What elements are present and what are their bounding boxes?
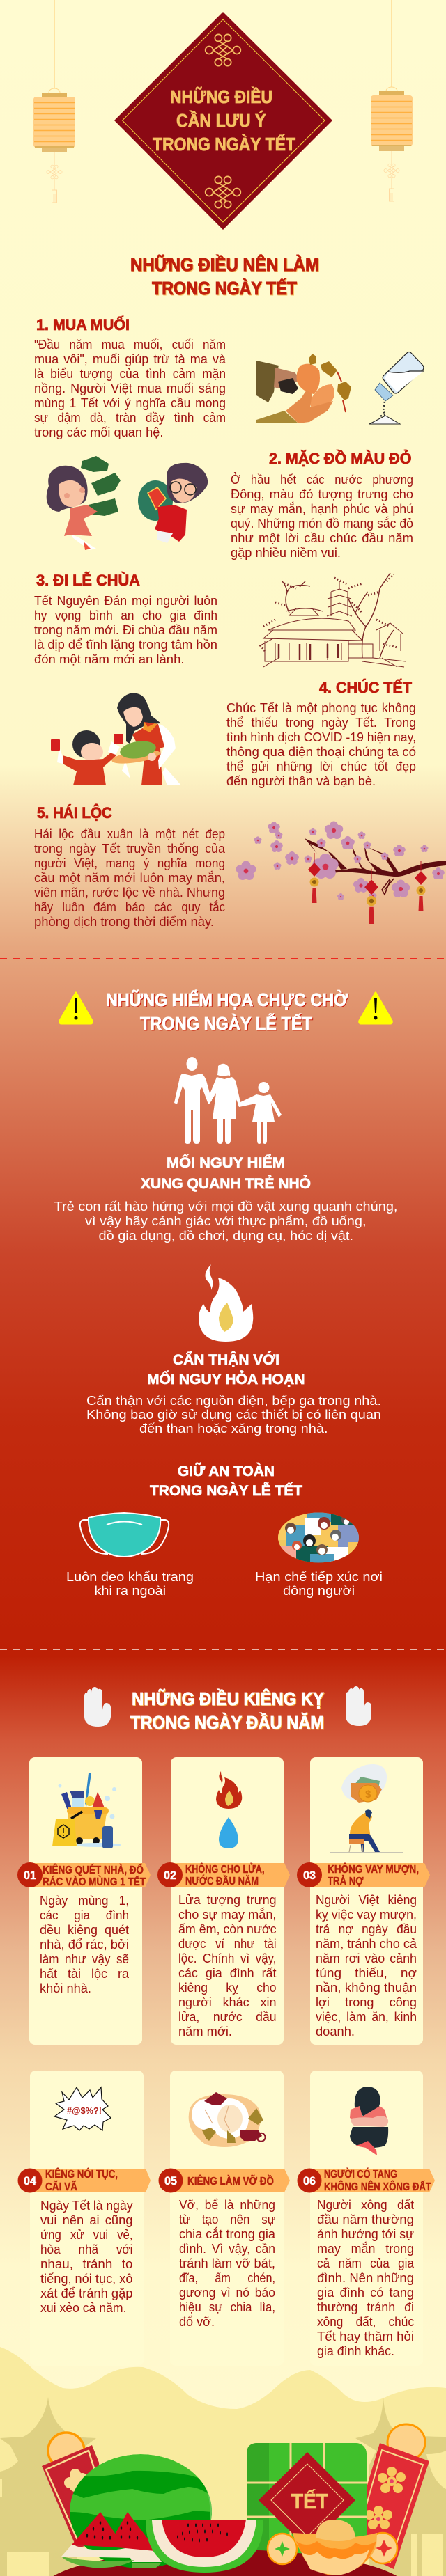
panel: taboo 06 mourning families xyxy=(297,2071,435,2366)
panel: 2 wear red: quý. Những món đồ mang sắc đỏ xyxy=(231,516,413,531)
title diamond: CẦN LƯU Ý xyxy=(176,110,266,131)
panel: 4 new year greetings: thể thiếu trong ngày Tết. Trong xyxy=(226,716,416,730)
icon: curse speech burst xyxy=(54,2087,111,2130)
icon: family silhouette xyxy=(174,1057,282,1144)
panel: 2 wear red xyxy=(231,450,413,560)
icon: crowd of masked people xyxy=(278,1510,359,1564)
heading: staying safe: GIỮ AN TOÀN xyxy=(178,1462,275,1479)
panel: 1 buy salt: nồng. Người Việt mua muối sáng xyxy=(34,382,226,395)
footer: banh chung xyxy=(247,2443,367,2557)
ribbon label 04 xyxy=(18,2168,151,2193)
text block 04: nhau, tránh to xyxy=(40,2257,132,2271)
text block 05: hiệu sự chia lìa, xyxy=(179,2300,275,2314)
caption: wear a mask xyxy=(66,1570,194,1598)
icon: girl carrying banh chung xyxy=(47,456,121,550)
footer scene: pagoda silhouettes xyxy=(0,2397,446,2576)
title diamond xyxy=(114,12,332,230)
text block: fire hazards: Không bao giờ sử dụng các thiết bị có liên quan xyxy=(86,1408,381,1422)
text block: children hazards: XUNG QUANH TRẺ NHỎ xyxy=(141,1175,311,1192)
panel: 1 buy salt: trong các mối quan hệ. xyxy=(34,425,163,439)
panel: 5 picking lucky buds: phòng dịch trong thời điểm này. xyxy=(34,915,214,929)
text block 02: cho sự may mắn, xyxy=(178,1907,276,1922)
text block 06: thường tránh đi xyxy=(317,2300,414,2314)
ribbon label 03: KHÔNG VAY MƯỢN, xyxy=(328,1863,419,1876)
text block 05: đình. Vì vậy, cần xyxy=(179,2242,275,2256)
ribbon label 01: KIÊNG QUÉT NHÀ, ĐỔ xyxy=(43,1864,144,1876)
text block 06: ảnh hưởng tới sự xyxy=(317,2227,414,2241)
panel: 2 wear red: như một lời cầu chúc đầu năm xyxy=(231,531,413,545)
text block 05: đổ vỡ. xyxy=(179,2315,215,2329)
text block 06: xông đất, chúc xyxy=(317,2315,414,2329)
ribbon label 02: NƯỚC ĐẦU NĂM xyxy=(185,1875,259,1887)
title diamond: TRONG NGÀY TẾT xyxy=(153,134,295,155)
divider: white dashed line xyxy=(0,1649,446,1650)
panel: 4 new year greetings xyxy=(226,679,416,788)
footer: gold coins and ingot xyxy=(268,2520,397,2575)
text block 04: xui xẻo cả năm. xyxy=(40,2301,127,2315)
icon: broken dishes xyxy=(189,2092,266,2147)
title diamond: NHỮNG ĐIỀU xyxy=(170,86,272,107)
panel: 5 picking lucky buds: viên mãn, rước lộc về nhà. Nhưng xyxy=(34,886,225,900)
icon: face mask xyxy=(80,1513,169,1557)
icon: boy carrying watermelon xyxy=(138,463,208,543)
text block 05 xyxy=(179,2198,276,2329)
text block 03: năm rơi vào cảnh xyxy=(316,1951,417,1965)
icon: salt shaker xyxy=(369,352,424,424)
panel: 3 go to pagoda: 3. ĐI LỄ CHÙA xyxy=(36,571,140,589)
text block 06 xyxy=(317,2198,415,2358)
text block 06: đầu năm thường xyxy=(317,2213,414,2226)
footer: left coin xyxy=(48,2433,84,2469)
panel: 1 buy salt: 1. MUA MUỐI xyxy=(36,315,130,333)
panel: 3 go to pagoda xyxy=(34,571,217,666)
icon: wallet with money xyxy=(341,1764,387,1803)
heading: staying safe xyxy=(150,1462,302,1499)
icon: right warning triangle xyxy=(360,993,392,1023)
text block 06: đình. Nên những xyxy=(317,2271,414,2285)
icon: worried man on stool xyxy=(330,1809,403,1853)
text block 06: may mắn trong xyxy=(317,2241,414,2256)
panel: 4 new year greetings: thông qua điện thoại chúng ta có xyxy=(226,745,416,759)
footer: Tet diamond label: TẾT xyxy=(291,2489,328,2513)
text block: fire hazards: MỐI NGUY HỎA HOẠN xyxy=(147,1369,305,1388)
text block 04: tiếng, nói tục, xô xyxy=(40,2272,132,2286)
panel: 5 picking lucky buds: hãy luôn đảm bảo các quy tắc xyxy=(34,900,225,914)
text block 05: từ tạo nên sự xyxy=(179,2213,275,2226)
text block 06: gia đình có tang xyxy=(317,2286,414,2300)
heading: hazards: TRONG NGÀY LỄ TẾT xyxy=(140,1013,312,1034)
text block 03: kỵ việc vay mượn, xyxy=(316,1908,417,1922)
heading: taboos: NHỮNG ĐIỀU KIÊNG KỴ xyxy=(132,1688,324,1709)
panel: 4 new year greetings: tình hình dịch COVID -19 hiện nay, xyxy=(226,730,416,744)
text block 04: hòa nhã với xyxy=(40,2243,132,2256)
text block 02 xyxy=(178,1893,276,2039)
ribbon label 06 xyxy=(297,2168,435,2193)
panel: 4 new year greetings: Chúc Tết là một phong tục không xyxy=(226,701,416,715)
text block: fire hazards: Cẩn thận với các nguồn điện, bếp ga trong nhà. xyxy=(86,1394,381,1408)
text block 04: vui nên ai cũng xyxy=(40,2213,132,2227)
text block: fire hazards xyxy=(86,1351,381,1436)
text block 05: Vỡ, bể là những xyxy=(179,2198,275,2212)
panel: taboo 05 breaking things xyxy=(159,2071,290,2366)
text block 01: khỏi nhà. xyxy=(40,1981,91,1995)
icon: left hanging lantern xyxy=(33,0,75,203)
panel: 3 go to pagoda: hy vọng bình an cho gia đình xyxy=(34,608,217,622)
caption: avoid crowds: Hạn chế tiếp xúc nơi xyxy=(255,1570,383,1584)
text block 06: cả năm của gia xyxy=(317,2256,415,2270)
text block 04: xát để tránh gặp xyxy=(40,2286,132,2300)
ribbon label 05 xyxy=(159,2168,290,2193)
caption: avoid crowds xyxy=(255,1570,383,1598)
panel: 1 buy salt: mùng 1 Tết với ý nghĩa cầu mong xyxy=(34,396,226,410)
caption: avoid crowds: đông người xyxy=(283,1584,355,1598)
footer: left red envelope xyxy=(42,2445,115,2548)
text block 03: lợi trong công xyxy=(316,1995,417,2009)
footer: right red envelope xyxy=(348,2443,429,2569)
panel: taboo 01 sweeping xyxy=(17,1757,151,2045)
icon: flame xyxy=(199,1264,253,1342)
icon: left stop hand xyxy=(84,1687,111,1727)
icon: curse speech burst: #@$%?! xyxy=(67,2105,102,2116)
panel: 4 new year greetings: 4. CHÚC TẾT xyxy=(319,679,412,696)
text block: children hazards: vì vậy hãy cảnh giác với thực phẩm, đồ uống, xyxy=(85,1214,367,1228)
footer: watermelon half slice xyxy=(146,2520,263,2573)
heading: things to do: NHỮNG ĐIỀU NÊN LÀM xyxy=(130,254,319,275)
text block 01: hất tài lộc ra xyxy=(40,1967,130,1981)
heading: taboos xyxy=(130,1688,324,1733)
caption: wear a mask: Luôn đeo khẩu trang xyxy=(66,1570,194,1584)
panel: 1 buy salt: mua vôi", muối giúp trừ tà ma và xyxy=(34,352,226,366)
icon: hands holding salt bags xyxy=(256,354,351,423)
panel: 2 wear red: gặp nhiều niềm vui. xyxy=(231,546,341,560)
text block 03: nần, không thuận xyxy=(316,1981,417,1995)
text block 01: Ngày mùng 1, xyxy=(40,1894,129,1908)
text block 04 xyxy=(40,2199,132,2315)
text block 02: được ví như tài xyxy=(178,1937,276,1951)
panel: 5 picking lucky buds: trong ngày Tết truyền thống của xyxy=(34,842,226,856)
footer: table xyxy=(40,2550,410,2576)
text block 02: người khác xin xyxy=(178,1995,276,2009)
text block 02: lửa, nước đầu xyxy=(178,2010,276,2024)
ribbon label 01: RÁC VÀO MÙNG 1 TẾT xyxy=(43,1876,146,1888)
icon: mother and child with banh chung xyxy=(51,693,181,785)
ribbon label 05: 05 xyxy=(164,2174,177,2188)
panel: taboo 03 borrowing xyxy=(297,1757,430,2045)
text block 03: năm, tránh cho cả xyxy=(316,1937,417,1951)
heading: things to do: TRONG NGÀY TẾT xyxy=(152,278,297,299)
panel: 5 picking lucky buds xyxy=(34,804,226,929)
panel: 1 buy salt: sự đậm đà, tràn đầy tình cảm xyxy=(34,411,226,425)
panel: 2 wear red: sự may mắn, hạnh phúc và phú xyxy=(231,501,413,516)
panel: taboo 04 bad language xyxy=(18,2071,151,2366)
ribbon label 04: 04 xyxy=(24,2174,37,2188)
icon: pagoda sketch xyxy=(259,573,406,667)
ribbon label 03: 03 xyxy=(303,1869,316,1882)
ribbon label 02: 02 xyxy=(164,1869,176,1882)
icon: flame xyxy=(216,1771,242,1809)
icon: right stop hand xyxy=(346,1686,371,1726)
footer: Tet diamond label xyxy=(259,2452,355,2548)
heading: taboos: TRONG NGÀY ĐẦU NĂM xyxy=(130,1713,324,1733)
heading: hazards: NHỮNG HIỂM HỌA CHỰC CHỜ xyxy=(106,989,348,1010)
ribbon label 04: CÃI VÃ xyxy=(45,2181,77,2193)
text block 02: ấm êm, còn nước xyxy=(178,1922,276,1936)
text block 05: đĩa, ấm chén, xyxy=(179,2271,275,2285)
text block 06: Người xông đất xyxy=(317,2198,414,2212)
text block 02: lộc. Chính vì vậy, xyxy=(178,1951,276,1965)
text block 02: các gia đình rất xyxy=(178,1966,276,1980)
text block: children hazards xyxy=(54,1153,397,1243)
ribbon label 01 xyxy=(17,1862,151,1888)
panel: 1 buy salt xyxy=(34,315,226,439)
text block 03: doanh. xyxy=(316,2025,355,2039)
icon: wallet with money: $ xyxy=(365,1789,371,1800)
ribbon label 06: 06 xyxy=(303,2174,316,2188)
text block 01: làm như vậy sẽ xyxy=(40,1952,129,1966)
panel: 1 buy salt: là biểu tượng của tình cảm mặn xyxy=(34,367,226,381)
icon: left warning triangle xyxy=(60,993,92,1023)
panel: 3 go to pagoda: đón một năm mới an lành. xyxy=(34,652,184,666)
text block 04: ứng xử vui vẻ, xyxy=(40,2228,132,2242)
panel: 4 new year greetings: đến người thân và bạn bè. xyxy=(226,774,376,788)
ribbon label 05: KIÊNG LÀM VỠ ĐỒ xyxy=(187,2175,274,2188)
text block 03: túng thiếu, nợ xyxy=(316,1966,417,1980)
ribbon label 03 xyxy=(297,1862,430,1887)
text block 01: nhà, đổ rác, bởi xyxy=(40,1938,129,1951)
text block 05: gương vì nó báo xyxy=(179,2286,275,2300)
text block 03: Người Việt kiêng xyxy=(316,1893,417,1907)
panel: 3 go to pagoda: là dịp để tĩnh lặng trong tâm hồn xyxy=(34,638,217,652)
text block 06: gia đình khác. xyxy=(317,2344,394,2358)
text block: children hazards: MỐI NGUY HIỂM xyxy=(167,1153,285,1171)
text block: fire hazards: CẨN THẬN VỚI xyxy=(173,1351,279,1368)
ribbon label 04: KIÊNG NÓI TỤC, xyxy=(45,2168,118,2181)
heading: staying safe: TRONG NGÀY LỄ TẾT xyxy=(150,1481,302,1499)
text block 05: chia cắt trong gia xyxy=(179,2226,276,2241)
text block 01: đều kiêng quét xyxy=(40,1923,129,1937)
panel: 2 wear red: Ở hầu hết các nước phương xyxy=(231,472,413,487)
icon: right hanging lantern xyxy=(371,0,413,201)
icon: water drop xyxy=(219,1817,238,1848)
text block 04: Ngày Tết là ngày xyxy=(40,2199,132,2213)
text block: fire hazards: đến than hoặc xăng trong nhà. xyxy=(139,1422,328,1436)
ribbon label 06: NGƯỜI CÓ TANG xyxy=(324,2168,397,2181)
panel: 3 go to pagoda: trong năm mới. Đi chùa đầu năm xyxy=(34,623,217,637)
ribbon label 01: 01 xyxy=(24,1869,36,1882)
heading: things to do xyxy=(130,254,319,299)
text block 01 xyxy=(40,1894,130,1995)
panel: 4 new year greetings: thể gửi những lời chúc tốt đẹp xyxy=(226,760,416,773)
panel: 2 wear red: Đông, màu đỏ tượng trưng cho xyxy=(231,487,413,501)
panel: 5 picking lucky buds: cầu một năm mới luôn may mắn, xyxy=(34,870,225,885)
caption: wear a mask: khi ra ngoài xyxy=(95,1584,166,1598)
footer scene: hills xyxy=(0,2347,446,2576)
text block 01: các gia đình xyxy=(40,1908,129,1922)
footer: right coin xyxy=(387,2424,425,2460)
heading: hazards xyxy=(106,989,348,1034)
text block: children hazards: đồ gia dụng, đồ chơi, dụng cụ, hóc dị vật. xyxy=(99,1229,353,1243)
text block 06: Tết hay thăm hỏi xyxy=(317,2330,414,2343)
ribbon label 02: KHÔNG CHO LỬA, xyxy=(185,1863,265,1876)
icon: blossom branch with ornaments xyxy=(236,822,446,924)
panel: 2 wear red: 2. MẶC ĐỒ MÀU ĐỎ xyxy=(269,450,411,467)
icon: sad person hugging knees xyxy=(350,2087,388,2155)
panel: taboo 02 fire and water xyxy=(157,1757,290,2045)
ribbon label 02 xyxy=(157,1862,290,1887)
text block: children hazards: Trẻ con rất hào hứng với mọi đồ vật xung quanh chúng, xyxy=(54,1200,397,1214)
panel: 5 picking lucky buds: Hái lộc đầu xuân là một nét đẹp xyxy=(34,827,225,841)
ribbon label 03: TRẢ NỢ xyxy=(328,1876,364,1887)
text block 02: Lửa tượng trưng xyxy=(178,1893,276,1907)
icon: cleaning supplies xyxy=(52,1773,121,1848)
panel: 3 go to pagoda: Tết Nguyên Đán mọi người luôn xyxy=(34,594,217,608)
panel: 5 picking lucky buds: người Việt, mang ý nghĩa mong xyxy=(34,856,225,870)
text block 03: trả nợ ngày đầu xyxy=(316,1922,417,1936)
footer: watermelon triangle slices xyxy=(61,2512,162,2568)
panel: 5 picking lucky buds: 5. HÁI LỘC xyxy=(37,804,112,822)
text block 02: kiêng kỵ cho xyxy=(178,1981,276,1995)
text block 03 xyxy=(316,1893,417,2039)
panel: 1 buy salt: "Đầu năm mua muối, cuối năm xyxy=(34,338,226,352)
text block 05: tránh làm vỡ bát, xyxy=(179,2256,275,2270)
text block 03: việc, làm ăn, kinh xyxy=(316,2010,417,2024)
footer: whole watermelon xyxy=(70,2454,212,2568)
text block 02: năm mới. xyxy=(178,2025,232,2039)
divider: red dashed line xyxy=(0,958,446,959)
